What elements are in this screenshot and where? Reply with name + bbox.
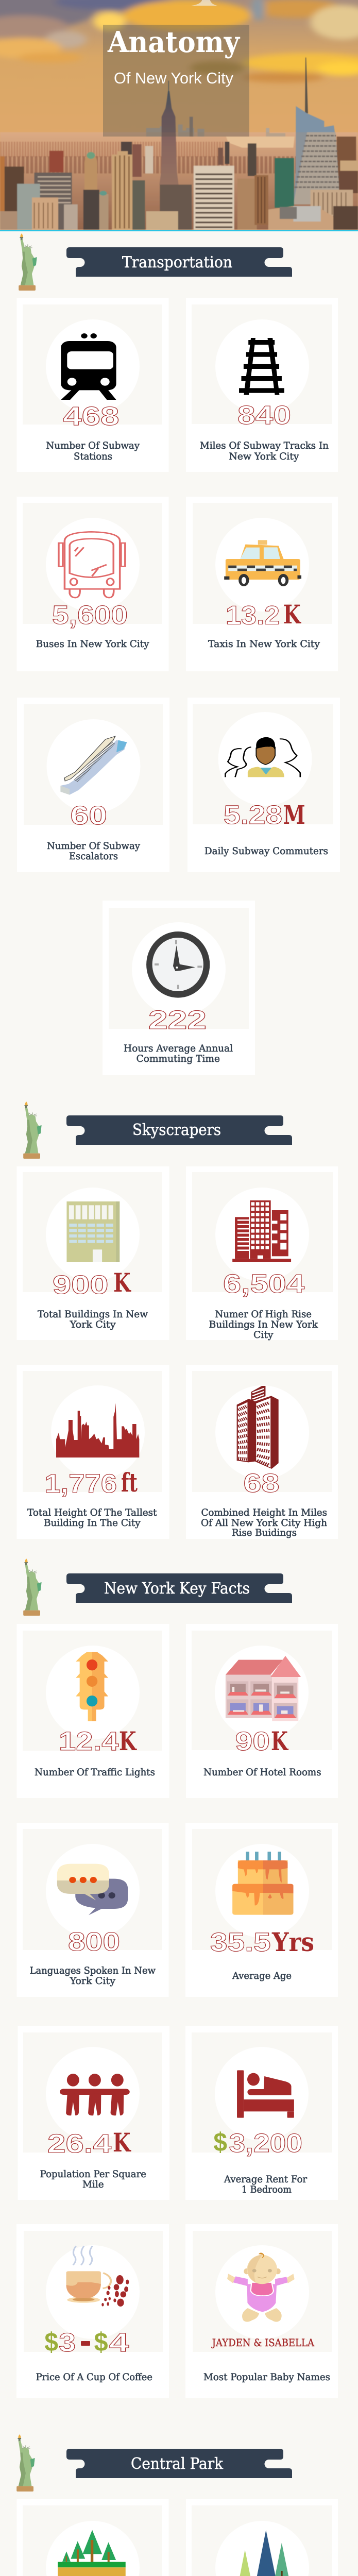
card: average age [185,1823,338,1997]
icon: trees [236,2530,291,2576]
icon: traffic light [76,1652,108,1721]
suffix: K [113,1267,131,1298]
card: trees [186,2499,338,2576]
icon: commuters [225,737,300,777]
label: York City [70,1976,116,1987]
label: Daily Subway Commuters [204,846,328,857]
icon: coffee cup [66,2246,129,2307]
number: 468 [63,401,120,431]
label: City [253,1330,274,1341]
title: Anatomy [107,25,240,59]
label: York City [70,1319,116,1330]
card: buses [16,497,169,671]
label: Average Rent For [224,2174,307,2185]
card: total buildings [16,1166,169,1340]
heading: New York Key Facts: New York Key Facts [104,1580,250,1598]
label: Rise Buidings [232,1528,297,1538]
label: Commuting Time [137,1054,220,1064]
statue of liberty: central park [16,2434,35,2492]
number: 5,600 [52,600,128,630]
label [200,440,329,462]
hero: New York skyline photo with title [0,0,358,230]
icon: speech bubbles [57,1864,128,1915]
number: $ [94,2327,108,2357]
icon: taxi [224,540,301,586]
label: Total Buildings In New [38,1309,148,1320]
number: 26.4 [47,2129,112,2158]
icon: hotel [226,1656,301,1721]
heading: New York Key Facts [66,1573,292,1603]
heading: Skyscrapers: Skyscrapers [132,1121,221,1139]
icon: 3d high rise [237,1386,279,1469]
statue of liberty: skyscrapers [23,1101,42,1159]
number: 222 [148,1005,207,1035]
number: 840 [237,400,291,430]
title overlay panel [103,25,249,137]
label [46,440,140,462]
label: Buildings In New York [209,1319,318,1330]
label: Hours Average Annual [124,1043,233,1054]
number: 90 [235,1726,270,1756]
suffix: K [113,2127,131,2158]
card: subway tracks [186,298,338,472]
number: 900 [53,1270,108,1299]
label: Numer Of High Rise [215,1309,312,1320]
icon: clock [146,931,210,998]
heading: Skyscrapers [66,1115,292,1145]
statue of liberty: transportation [19,233,37,291]
number: $ [44,2327,58,2357]
card: acres [16,2499,169,2576]
label: Number Of Subway [47,841,141,852]
card: daily commuters [187,698,340,872]
heading: Transportation [66,247,292,277]
card: taxis [186,497,338,671]
label: Combined Height In Miles [201,1507,327,1518]
card: average rent [185,2026,338,2200]
label: 1 Bedroom [242,2184,292,2195]
icon: office building [66,1201,120,1262]
label: Miles Of Subway Tracks In [200,440,329,451]
number: 35.5 [210,1927,271,1957]
icon: skyline [56,1403,139,1458]
card: baby names [185,2224,338,2398]
label: Number Of Subway [46,440,140,451]
heading: Central Park [66,2449,292,2478]
card: commuting time [103,901,255,1075]
label [40,2169,146,2190]
suffix: K [119,1726,137,1756]
label: Number Of Hotel Rooms [203,1767,321,1778]
number: JAYDEN & ISABELLA [211,2336,314,2349]
number: 68 [243,1468,279,1498]
label [47,841,141,862]
card: languages [16,1823,169,1997]
label [201,1507,327,1538]
label: Most Popular Baby Names [203,2372,330,2383]
suffix: K [283,599,301,630]
number: 4 [109,2328,129,2357]
statue of liberty: key facts [23,1558,42,1616]
label [38,1309,148,1330]
label: Buses In New York City [36,639,149,650]
label [30,1965,156,1987]
card: subway stations [16,298,169,472]
card: escalators [17,698,169,872]
subtitle: Of New York City [114,69,233,87]
card: high rise buildings [186,1166,338,1341]
icon: red towers [232,1200,291,1262]
label: Total Height Of The Tallest [27,1507,157,1518]
number: 5.28 [224,800,282,829]
number: 3 [59,2328,76,2357]
number: 800 [68,1927,120,1956]
label: Price Of A Cup Of Coffee [36,2372,152,2383]
icon: baby [227,2253,295,2322]
label: Languages Spoken In New [30,1965,156,1976]
icon: three people [60,2074,130,2115]
icon: escalator [60,736,127,795]
icon: bus [59,532,125,598]
number: 3,200 [229,2128,302,2158]
label: Mile [82,2179,104,2190]
card: tallest building [16,1365,169,1539]
heading: Central Park: Central Park [131,2455,224,2473]
number: 6,504 [223,1269,305,1298]
label: Of All New York City High [201,1518,327,1529]
number: 60 [70,801,107,830]
number: 12.4 [59,1726,119,1756]
suffix: K [271,1726,288,1756]
number [44,2327,129,2357]
label [27,1507,157,1529]
label: Stations [74,451,112,462]
label: Escalators [69,851,118,862]
label: Number Of Traffic Lights [35,1767,155,1778]
suffix: ft [121,1467,138,1498]
icon: railway track [239,338,284,395]
card: population density [18,2026,169,2200]
suffix: Yrs [271,1927,314,1957]
icon: bed [237,2070,294,2118]
card: traffic lights [16,1624,169,1798]
icon: subway train [61,333,116,400]
suffix: M [283,800,305,830]
icon: park land with trees [58,2530,126,2576]
icon: cake [232,1852,294,1915]
card: combined height [186,1365,338,1539]
label: New York City [229,451,299,462]
card: coffee price [16,2224,169,2398]
label: Taxis In New York City [208,639,320,650]
card: hotel rooms [186,1624,338,1798]
number: 13.2 [226,601,280,630]
hero divider [0,230,358,231]
label [224,2174,307,2195]
number: 1,776 [44,1469,117,1498]
label [209,1309,318,1341]
number: $ [213,2127,227,2157]
label: Average Age [232,1971,292,1981]
label [124,1043,233,1064]
label: Population Per Square [40,2169,146,2180]
label: Building In The City [44,1518,141,1529]
heading: Transportation: Transportation [122,253,232,272]
